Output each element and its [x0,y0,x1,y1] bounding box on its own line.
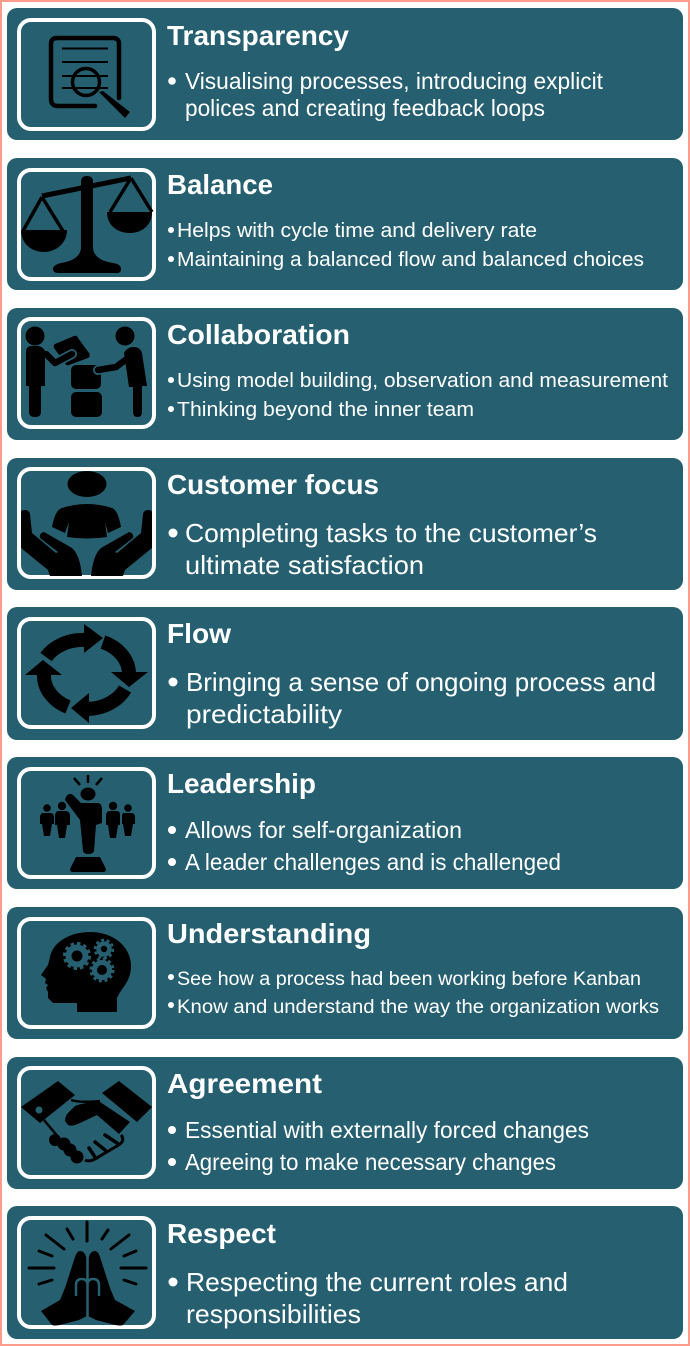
panel: leadership [7,757,683,889]
panel: respect [7,1206,683,1339]
text: Collaboration bullets: Using model building, observation and measurement [177,369,668,392]
text: Leadership bullets [168,817,561,875]
icon: leader with team [40,775,135,872]
text: Respect bullet: Respecting the current roles and [186,1267,568,1297]
text: Flow bullet: Bringing a sense of ongoing process and [186,667,656,697]
heading: Flow: Flow [167,618,231,649]
text: Transparency bullet: polices and creating feedback loops [185,95,545,121]
text: Balance bullets: Maintaining a balanced flow and balanced choices [177,248,644,271]
panel: agreement [7,1057,683,1189]
icon: praying hands [29,1222,146,1326]
text: Transparency bullet: Visualising processes, introducing explicit [185,68,604,94]
text: Collaboration bullets [168,369,668,421]
icon: handshake [21,1081,152,1164]
text: Agreement bullets: Agreeing to make necessary changes [185,1149,556,1175]
heading: Understanding: Understanding [167,918,371,949]
text: Collaboration bullets: Thinking beyond the inner team [177,398,474,421]
panel: transparency [7,8,683,140]
icon: two people stacking boxes [26,326,147,417]
heading: Transparency: Transparency [167,20,349,51]
icon: scales [21,176,152,273]
heading: Agreement: Agreement [167,1068,322,1099]
icon: circular arrows [25,624,148,723]
text: Understanding bullets: See how a process had been working before Kanban [177,969,641,990]
text: Customer focus bullet: Completing tasks to the customer’s [185,518,597,548]
icon: head with gears [41,932,131,1012]
text: Balance bullets: Helps with cycle time and delivery rate [177,219,537,242]
panel: collaboration [7,308,683,440]
heading: Customer focus: Customer focus [167,469,379,500]
text: Flow bullet: predictability [186,699,342,729]
text: Respect bullet: responsibilities [186,1299,361,1329]
text: Customer focus bullet: ultimate satisfaction [185,550,424,580]
text: Agreement bullets: Essential with externally forced changes [185,1117,589,1143]
heading: Respect: Respect [167,1218,276,1249]
panel: customer focus [7,458,683,590]
text: Leadership bullets: A leader challenges and is challenged [185,849,561,875]
text: Customer focus bullet [168,518,597,580]
text: Understanding bullets: Know and understand the way the organization works [177,997,659,1018]
heading: Collaboration: Collaboration [167,319,350,350]
text: Respect bullet [168,1267,568,1329]
text: Agreement bullets [168,1117,589,1175]
icon: document with magnifier [51,38,130,118]
text: Transparency bullet [168,68,604,121]
text: Understanding bullets [168,969,659,1018]
panel: balance [7,158,683,290]
text: Balance bullets [168,219,644,271]
heading: Balance: Balance [167,169,273,200]
panel: flow [7,607,683,740]
text: Flow bullet [168,667,656,729]
heading: Leadership: Leadership [167,768,316,799]
panel: understanding [7,907,683,1039]
text: Leadership bullets: Allows for self-organization [185,817,462,843]
icon: hands holding a person [21,471,152,576]
